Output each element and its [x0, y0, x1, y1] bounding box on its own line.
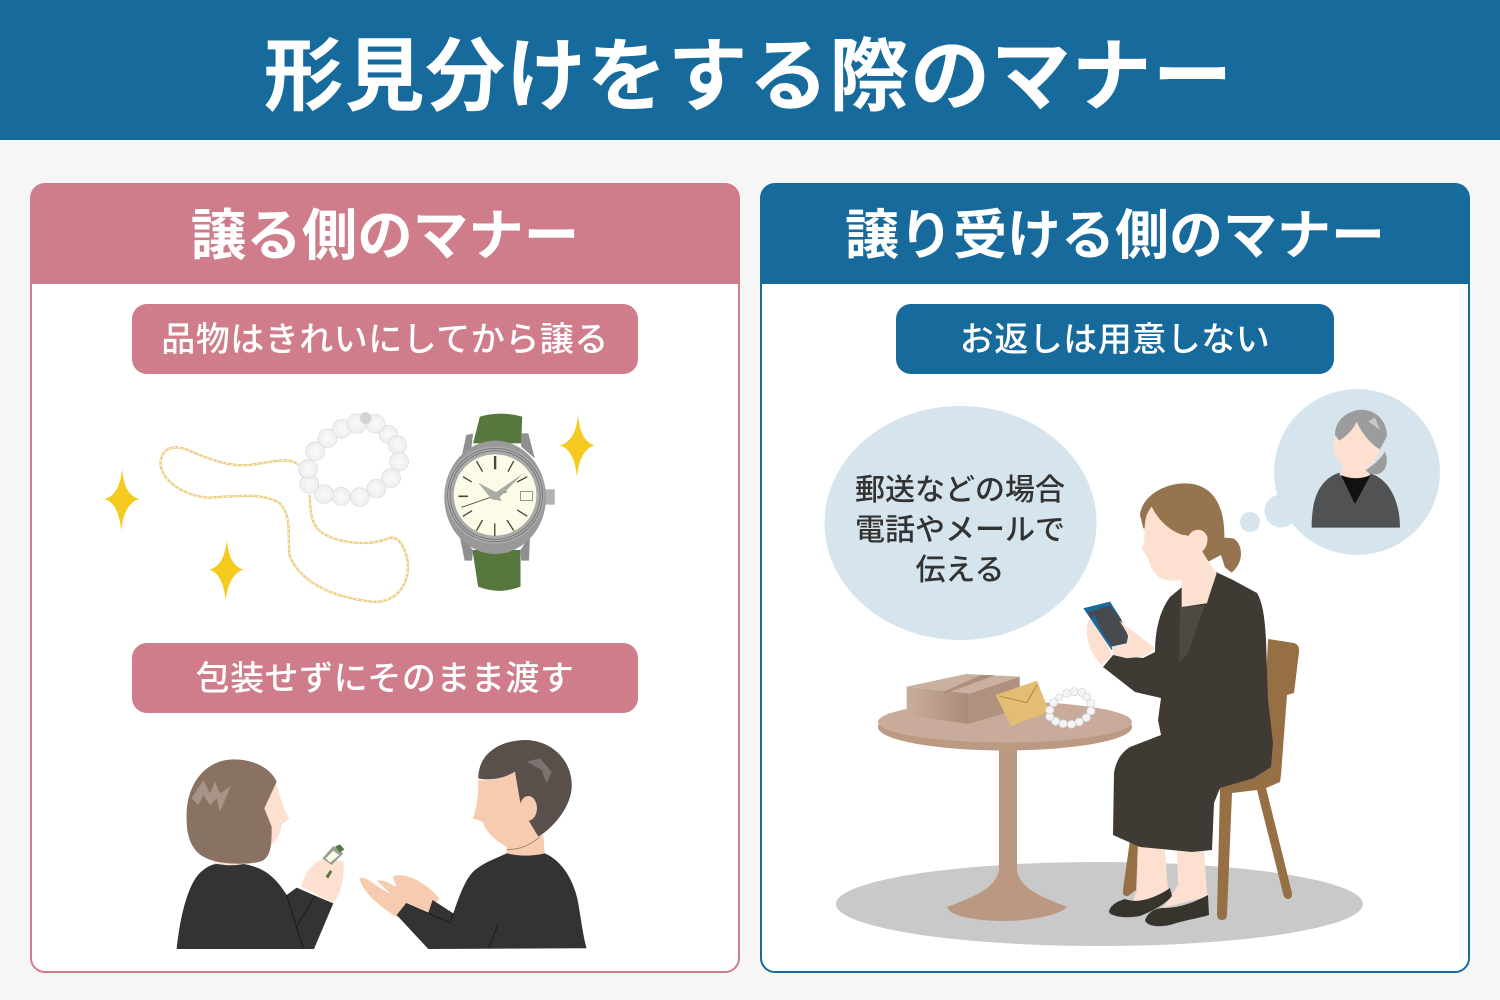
label: hand over unwrapped [132, 643, 638, 713]
legs [1130, 845, 1209, 908]
illustration: seated woman with phone [1083, 483, 1299, 926]
heading: giver's manners: 譲る側のマナー [191, 205, 579, 267]
label: no return gift: お返しは用意しない [960, 321, 1270, 359]
panel: receiver's manners [760, 183, 1470, 973]
illustration: round table with parcel, letter and pearls [878, 674, 1132, 921]
chair [1123, 639, 1299, 920]
callout: contact by phone or mail [824, 406, 1096, 640]
label: clean the items: 品物はきれいにしてから譲る [161, 321, 609, 359]
label: hand over unwrapped: 包装せずにそのまま渡す [196, 660, 574, 698]
title banner [0, 0, 1500, 140]
woman figure [177, 759, 344, 949]
thought bubble: elderly woman [1240, 389, 1440, 555]
icon: sparkle left [105, 468, 139, 531]
title: 形見分けをする際のマナー [264, 32, 1233, 121]
jacket and skirt [1103, 572, 1273, 852]
callout: contact by phone or mail: 伝える [915, 554, 1005, 587]
heading: receiver's manners [762, 185, 1468, 284]
icon: gold necklace [160, 447, 408, 602]
icon: envelope [996, 681, 1049, 726]
callout: contact by phone or mail: 電話やメールで [855, 514, 1065, 547]
floor shadow [836, 862, 1363, 946]
label: clean the items [132, 304, 638, 374]
shoes [1109, 888, 1209, 926]
callout: contact by phone or mail: 郵送などの場合 [855, 474, 1065, 507]
head and hair [1083, 483, 1241, 665]
heading: giver's manners [32, 185, 738, 284]
label: no return gift [896, 304, 1334, 374]
icon: pearl bracelet [298, 412, 409, 506]
man figure [359, 740, 587, 949]
icon: small pearl bracelet [1046, 688, 1095, 728]
illustration: jewelry and watch [105, 412, 594, 602]
phone and hands [1083, 602, 1155, 665]
blouse [1179, 605, 1205, 663]
heading: receiver's manners: 譲り受ける側のマナー [845, 206, 1385, 266]
icon: cardboard box [907, 674, 1020, 724]
panel: giver's manners [30, 183, 740, 973]
icon: sparkle right [560, 414, 594, 477]
icon: wristwatch [444, 414, 555, 591]
illustration: handing over a watch [177, 740, 587, 949]
icon: sparkle bottom [209, 539, 244, 601]
